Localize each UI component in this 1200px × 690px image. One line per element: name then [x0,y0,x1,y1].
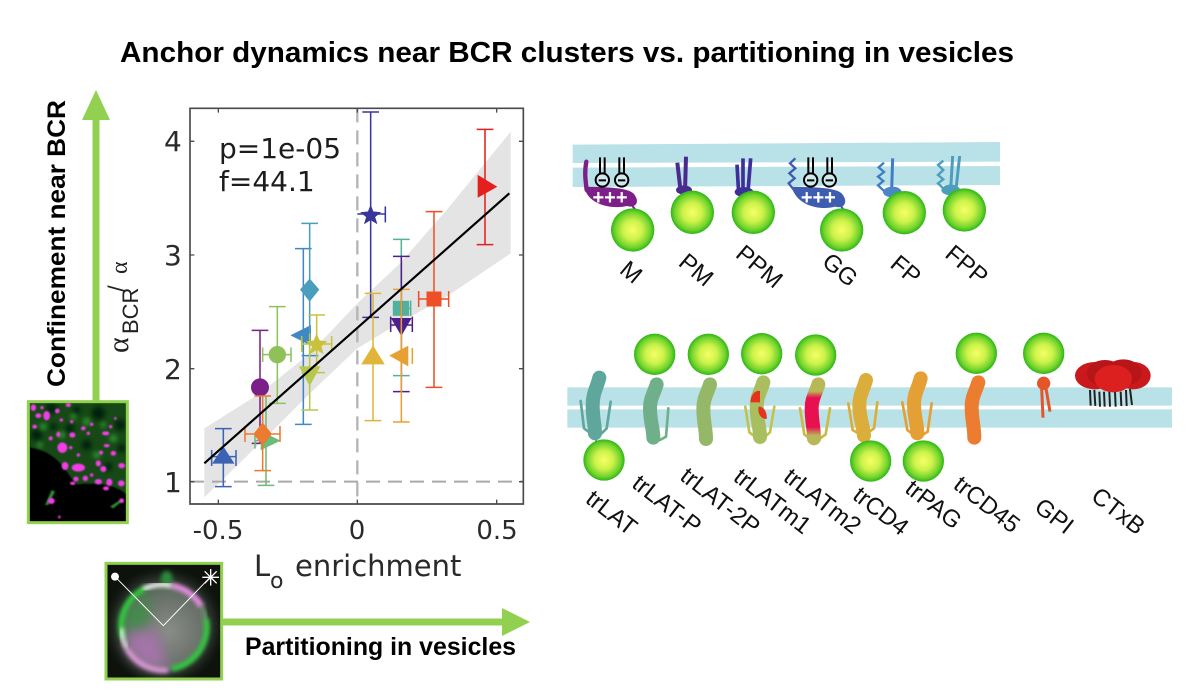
panel: peripheral anchors [573,142,1000,294]
y axis ticks: 3 [164,239,182,272]
y axis ticks: 2 [164,353,182,386]
anchor: trLAT-2P [688,334,729,439]
y axis label: α [102,337,135,353]
labels: FPP [940,240,993,291]
labels: trLATm2 [778,463,866,540]
y axis ticks [164,125,182,499]
data point: trLATm1 [301,333,325,410]
anchor: trLATm1 [741,333,782,437]
x axis ticks: 0 [349,516,365,546]
labels: trLAT-P [627,470,706,540]
data point: trLAT-P [255,397,278,485]
data point: CTxB [245,396,280,471]
membrane [573,142,1000,187]
data point: M [252,330,268,443]
labels [581,462,1150,541]
data point: trPAG [391,289,412,422]
labels: GG [817,248,863,293]
y axis ticks: 1 [164,466,182,499]
data point: FP [293,249,318,424]
regression line [204,193,509,463]
annotation: p value and f [219,132,341,198]
x axis ticks: -0.5 [193,516,243,546]
anchor: trCD45 [956,333,997,438]
annotation: p value and f: p=1e-05 [219,132,341,165]
y axis label: / [104,285,131,292]
anchor: FPP [938,156,986,232]
anchor: M: +++ [592,187,628,209]
labels: PM [673,248,718,292]
plot area [190,108,523,504]
data point: GG [393,239,411,376]
anchor: PPM [732,158,775,234]
image: vesicle micrograph [106,563,222,679]
anchor: GG [789,157,863,252]
data point: PPM [357,112,385,317]
labels: FP [885,250,926,290]
y axis label: α [107,261,133,274]
labels [614,240,993,294]
chart: scatter plot of alpha ratio vs Lo enrichment [102,108,523,594]
data point: trCD4 [363,293,383,421]
anchor: CTxB [1075,359,1151,407]
anchor: trLAT [581,378,625,481]
data point: trLATm2 [302,315,332,373]
anchor: PM [671,157,714,234]
labels: GPI [1029,493,1079,540]
data point: trCD45 [419,212,449,387]
labels: trCD4 [848,482,914,541]
labels: trLATm1 [728,463,816,540]
anchor: trCD4 [848,380,891,482]
annotation: p value and f: f=44.1 [219,165,315,198]
anchor: GG: +++ [801,187,836,209]
labels: trLAT [581,485,642,541]
x axis label: o [270,569,283,594]
anchor: M [584,157,654,252]
data point: trLAT-2P [263,307,291,403]
x axis label: enrichment [295,549,461,583]
axis label: confinement near BCR: Confinement near BCR [43,100,71,387]
axis label: partitioning in vesicles: Partitioning in vesicles [245,633,516,661]
data point: FPP [301,223,318,356]
labels: M [614,256,647,289]
image: BCR cluster micrograph [28,402,127,523]
axes box [190,108,523,504]
x axis ticks: 0.5 [476,516,518,546]
labels: trPAG [900,475,967,535]
title: Anchor dynamics near BCR clusters vs. partitioning in vesicles [120,37,1014,69]
labels: trLAT-2P [675,462,765,541]
y axis ticks: 4 [164,125,182,158]
labels: trCD45 [948,471,1025,539]
data point: PM [391,256,412,392]
anchor: FP [878,158,926,234]
labels: CTxB [1086,482,1150,541]
anchor: trLAT-P [634,334,675,440]
membrane [567,387,1172,428]
anchor: trLATm2 [795,334,836,439]
confidence band [204,132,511,497]
y axis label: BCR [118,288,143,334]
x axis label: L [254,549,270,583]
labels: PPM [731,240,788,294]
arrow: partitioning axis [222,608,530,636]
anchor: GPI [1023,333,1064,418]
anchor: trPAG [902,378,944,482]
data point: trLAT [212,429,236,487]
data point: GPI [477,129,495,245]
arrow: confinement axis [82,90,110,403]
x axis ticks [193,516,518,546]
panel: transmembrane anchors [567,333,1172,541]
